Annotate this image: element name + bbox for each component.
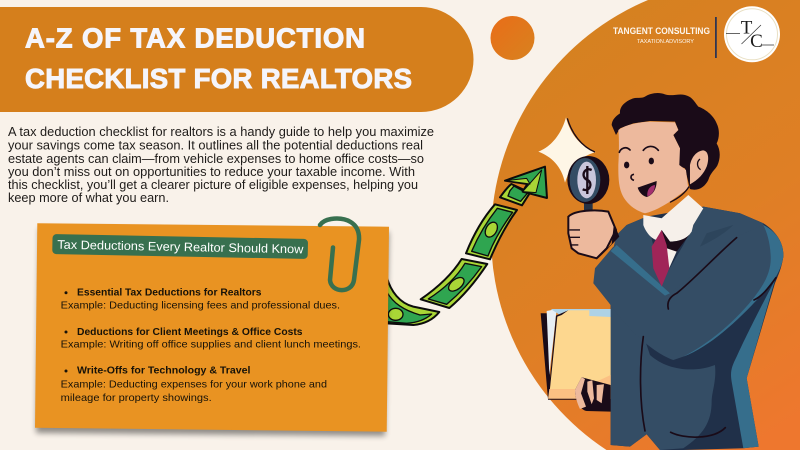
hand on folder (575, 377, 611, 412)
jacket lines (640, 238, 776, 437)
bill: lower (421, 259, 487, 308)
intro text block: this checklist, you’ll get a clearer picture of eligible expenses, helping you (8, 178, 418, 192)
cuff shadow (597, 223, 619, 259)
jacket light edge (731, 280, 775, 448)
jacket back (603, 207, 783, 450)
item 3: mileage for property showings. (61, 392, 212, 404)
item 3 (61, 365, 327, 404)
item 1: Example: Deducting licensing fees and professional dues. (61, 300, 340, 312)
item 2: Example: Writing off office supplies and client lunch meetings. (61, 339, 361, 351)
card body (35, 223, 389, 432)
hand on magnifier (568, 210, 616, 258)
title banner (0, 7, 474, 112)
jaw line (670, 187, 689, 202)
intro text block: A tax deduction checklist for realtors is a handy guide to help you maximize (8, 125, 434, 139)
hair (612, 93, 720, 190)
card shadow (36, 228, 389, 436)
tie (652, 230, 669, 287)
ear (690, 150, 708, 184)
title: CHECKLIST FOR REALTORS (25, 63, 412, 94)
intro text block (8, 125, 434, 205)
intro text block: your savings come tax season. It outlines all the potential deductions real (8, 138, 423, 152)
item 1 (61, 287, 340, 312)
eyes (624, 162, 629, 168)
logo: C (750, 31, 763, 52)
sleeve highlights (611, 225, 783, 357)
logo (724, 6, 780, 62)
sparkle (538, 117, 596, 183)
item 1: Essential Tax Deductions for Realtors (77, 287, 262, 299)
jacket (593, 207, 783, 450)
money arrow (387, 167, 547, 325)
paper clip (320, 219, 359, 290)
intro text block: estate agents can claim—from vehicle expenses to home office costs—so (8, 152, 424, 166)
brand name: TANGENT CONSULTING (613, 26, 710, 36)
item 3: Example: Deducting expenses for your work phone and (61, 379, 327, 391)
arm sleeve (593, 225, 783, 360)
folder (541, 309, 611, 412)
bill: arrow shaft (500, 184, 530, 205)
mouth (638, 181, 657, 197)
divider (715, 17, 717, 58)
intro text block: keep more of what you earn. (8, 191, 169, 205)
shirt collar (643, 195, 703, 242)
bill: upper (466, 204, 517, 259)
item 2 (61, 326, 361, 351)
title: A-Z OF TAX DEDUCTION (25, 22, 365, 54)
bill: bottom curl (387, 277, 439, 325)
head (612, 93, 720, 213)
logo: T (741, 18, 753, 38)
magnifying glass (567, 156, 609, 215)
small orange circle (490, 16, 534, 60)
face (618, 122, 688, 213)
bill: arrow head (505, 167, 547, 198)
brand name (613, 26, 710, 45)
eyebrows (619, 146, 658, 152)
title (25, 22, 412, 94)
checklist card (35, 219, 389, 436)
heading pill: Tax Deductions Every Realtor Should Know (57, 238, 304, 256)
jacket front (611, 305, 715, 450)
character (538, 93, 783, 450)
brand name: TAXATION.ADVISORY (637, 39, 694, 45)
nose (631, 174, 634, 180)
large orange circle (491, 0, 800, 450)
item 2: Deductions for Client Meetings & Office Costs (77, 326, 303, 338)
heading pill (52, 234, 308, 259)
item 3: Write-Offs for Technology & Travel (77, 365, 251, 377)
shirt below tie (660, 243, 677, 270)
intro text block: you don’t miss out on opportunities to reduce your taxable income. With (8, 165, 415, 179)
chest (613, 217, 670, 295)
